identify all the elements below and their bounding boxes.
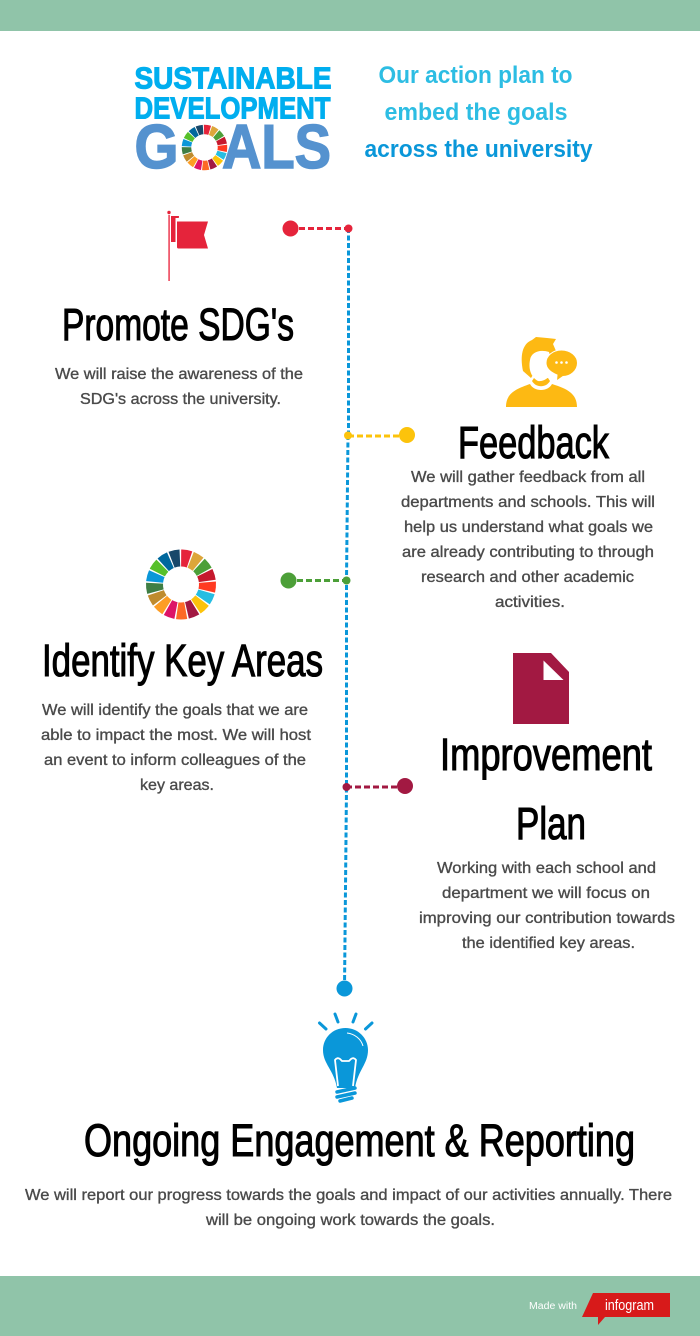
header title: Our action plan to <box>378 62 572 89</box>
icon: logo colour wheel <box>179 122 230 173</box>
heading: feedback: Feedback <box>458 417 609 468</box>
heading: improvement plan <box>440 729 652 849</box>
text: ongoing engagement: We will report our progress towards the goals and impact of our activities annually. There <box>25 1187 672 1204</box>
heading: improvement plan: Improvement <box>440 729 652 780</box>
text: feedback: research and other academic <box>421 569 634 586</box>
text: feedback: activities. <box>495 594 565 611</box>
text: identify <box>41 702 312 794</box>
header title <box>364 62 593 163</box>
text: promote: SDG's across the university. <box>80 391 281 408</box>
icon: infogram badge <box>582 1293 670 1325</box>
SDG logo: SUSTAINABLE <box>134 60 332 96</box>
text: identify: We will identify the goals that we are <box>42 702 308 719</box>
timeline line <box>344 228 348 988</box>
connector: improvement <box>342 778 413 794</box>
connector: promote <box>282 220 352 236</box>
text: improvement plan: Working with each school and <box>437 860 656 877</box>
header title: embed the goals <box>384 99 568 126</box>
header title: across the university <box>364 136 593 163</box>
text: ongoing engagement: will be ongoing work towards the goals. <box>205 1212 495 1229</box>
text: feedback <box>401 469 655 611</box>
text: ongoing engagement <box>25 1187 672 1229</box>
icon: flag <box>167 211 208 281</box>
heading: improvement plan: Plan <box>516 798 586 849</box>
timeline end dot <box>336 980 352 996</box>
text: identify: able to impact the most. We will host <box>41 727 312 744</box>
text: feedback: We will gather feedback from all <box>411 469 645 486</box>
heading: promote: Promote SDG's <box>62 299 294 350</box>
text: feedback: departments and schools. This will <box>401 494 655 511</box>
text: promote <box>55 366 303 408</box>
SDG logo: G <box>134 113 178 182</box>
SDG logo <box>134 60 332 182</box>
bottom bar <box>0 1276 700 1336</box>
text: improvement plan <box>419 860 675 952</box>
heading: identify: Identify Key Areas <box>42 635 323 686</box>
text: identify: an event to inform colleagues of the <box>44 752 306 769</box>
text: feedback: are already contributing to through <box>402 544 654 561</box>
icon: light bulb <box>320 1014 372 1101</box>
icon: document <box>513 653 569 724</box>
icon: SDG colour wheel <box>144 547 218 622</box>
text: improvement plan: improving our contribution towards <box>419 910 675 927</box>
footer: made with infogram: Made with <box>529 1301 577 1312</box>
text: improvement plan: department we will focus on <box>442 885 650 902</box>
connector: feedback <box>344 427 415 443</box>
SDG logo: ALS <box>222 113 331 182</box>
footer: made with infogram: infogram <box>605 1297 654 1314</box>
SDG logo: DEVELOPMENT <box>134 90 331 126</box>
top bar <box>0 0 700 31</box>
text: feedback: help us understand what goals we <box>404 519 653 536</box>
text: promote: We will raise the awareness of the <box>55 366 303 383</box>
icon: person with speech bubble <box>506 337 578 407</box>
footer: made with infogram <box>529 1293 670 1325</box>
connector: identify <box>280 572 350 588</box>
text: improvement plan: the identified key areas. <box>462 935 635 952</box>
text: identify: key areas. <box>140 777 214 794</box>
